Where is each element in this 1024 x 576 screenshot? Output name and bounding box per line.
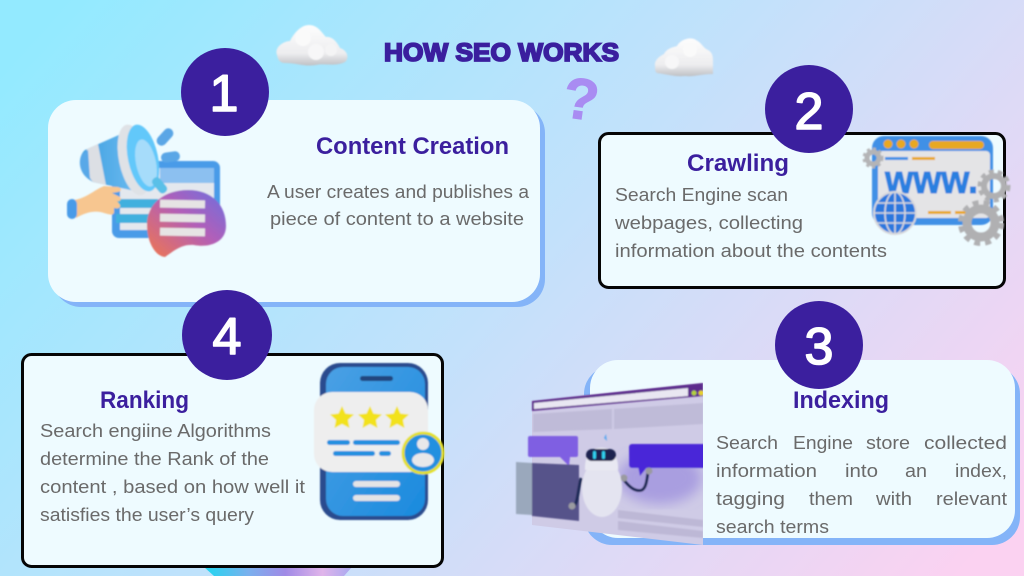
heading: content creation: Content Creation [316, 133, 509, 160]
text: indexing description: collected [924, 432, 1007, 453]
text: indexing description: information [716, 460, 817, 481]
bottom decorative shape [204, 567, 352, 576]
text: indexing description: with [875, 488, 912, 509]
text: content creation description: piece of content to a website [270, 208, 524, 229]
number badge 1 [181, 48, 269, 136]
icon: phone with star rating [314, 363, 443, 520]
icon: cloud right [655, 38, 713, 76]
icon: www browser window with globe and gears [864, 136, 1008, 244]
number badge 2: 2 [795, 83, 823, 141]
text: content creation description: A user creates and publishes a [267, 181, 530, 202]
text: indexing description: tagging [716, 488, 785, 509]
number badge 4 [182, 290, 272, 380]
number badge 3: 3 [805, 318, 833, 376]
text: crawling description: webpages, collecting [614, 212, 803, 233]
icon: megaphone with document and speech bubble [67, 122, 226, 257]
text: crawling description: information about the contents [615, 240, 887, 261]
text: indexing description: an [905, 460, 927, 481]
number badge 3 [775, 301, 863, 389]
icon: question mark: ? [559, 65, 603, 134]
illustration: robot and browser window [516, 383, 709, 545]
text: indexing description: into [845, 460, 878, 481]
panel: content creation [48, 48, 545, 307]
number badge 2 [765, 65, 853, 153]
panel: indexing [516, 301, 1020, 545]
text: indexing description: them [809, 488, 853, 509]
title: HOW SEO WORKS [384, 39, 619, 67]
text: indexing description: index, [955, 460, 1007, 481]
text: ranking description: satisfies the user’s query [40, 504, 255, 525]
text: ranking description: determine the Rank of the [40, 448, 269, 469]
text: indexing description: search terms [716, 516, 829, 537]
number badge 1: 1 [210, 65, 238, 123]
text: indexing description: store [866, 432, 910, 453]
icon: www browser window with globe and gears: www. [884, 158, 978, 202]
number badge 4: 4 [213, 308, 241, 366]
heading: indexing: Indexing [793, 387, 889, 414]
icon: cloud left [276, 25, 347, 66]
text: ranking description: Search engiine Algorithms [40, 420, 271, 441]
text: ranking description: content , based on how well it [40, 476, 305, 497]
text: crawling description: Search Engine scan [615, 184, 788, 205]
panel: crawling [600, 65, 1008, 288]
text: indexing description: Search [716, 432, 778, 453]
text: indexing description: relevant [936, 488, 1007, 509]
panel: ranking [22, 290, 443, 566]
heading: ranking: Ranking [100, 387, 189, 414]
text: indexing description: Engine [793, 432, 853, 453]
heading: crawling: Crawling [687, 150, 789, 177]
